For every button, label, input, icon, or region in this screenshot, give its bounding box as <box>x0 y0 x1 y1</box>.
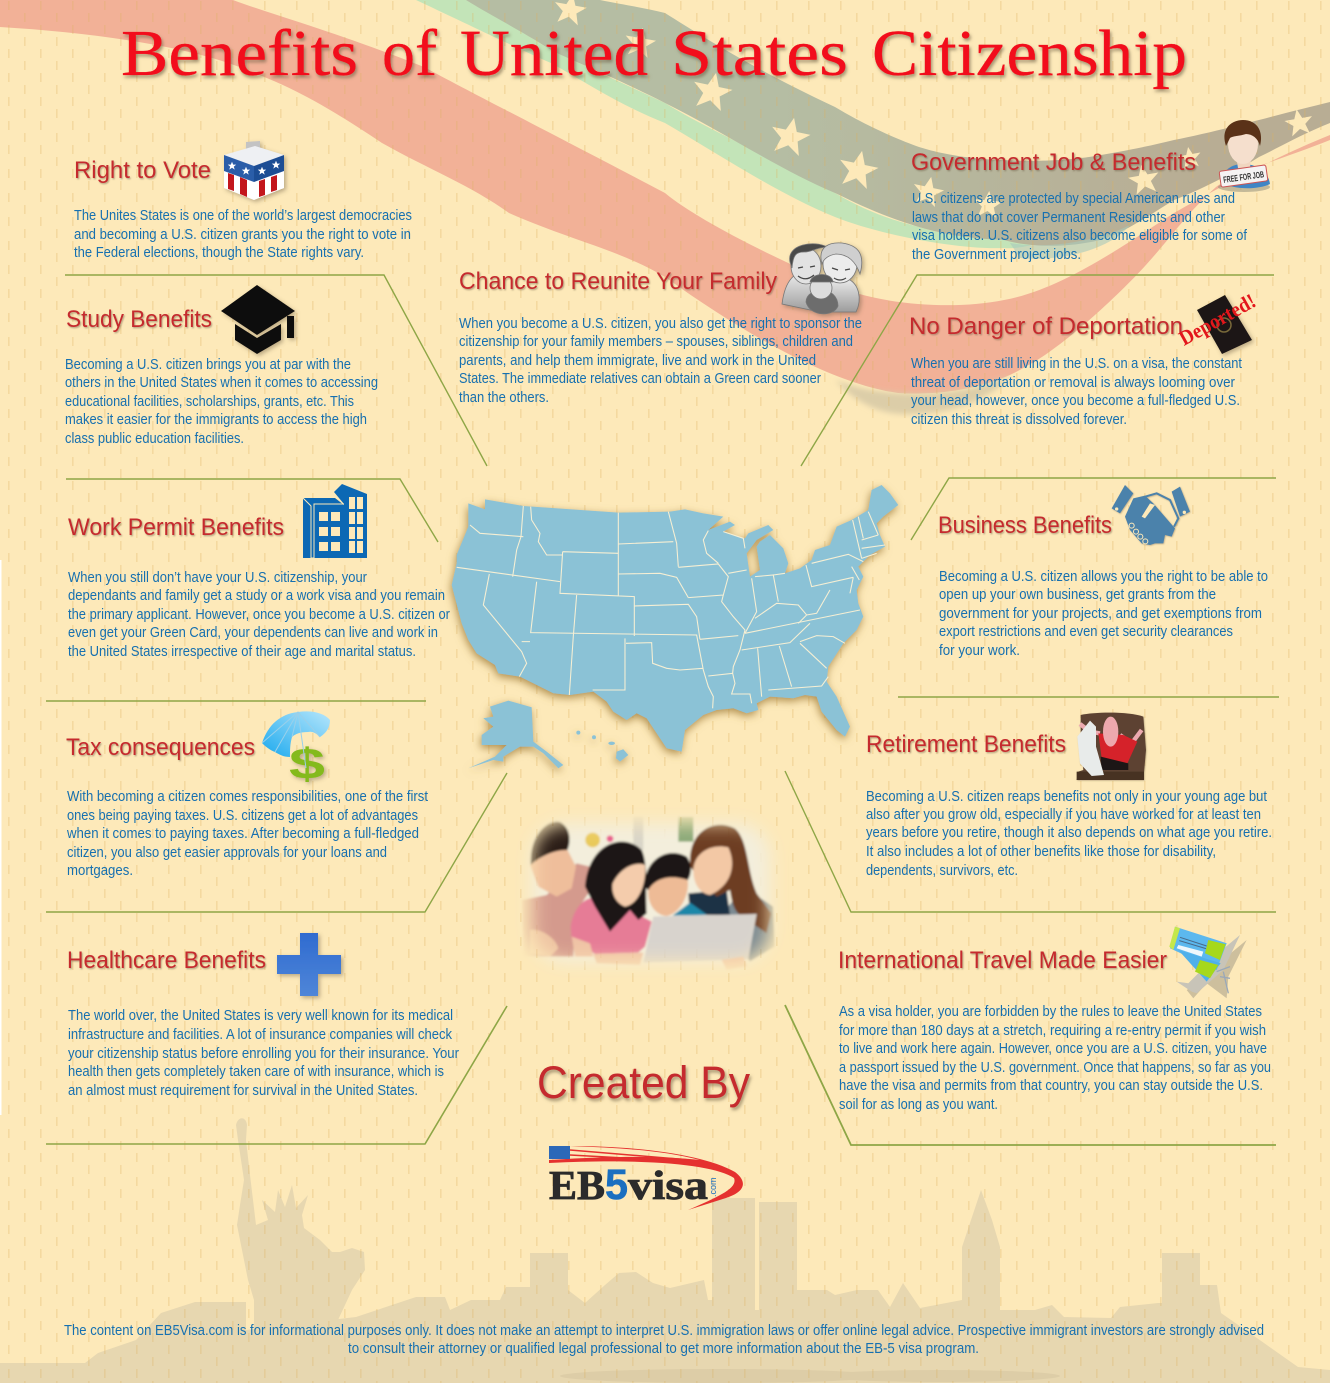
icon: passport deported: Deported! <box>1175 289 1260 350</box>
frame line: deportation <box>801 275 1274 466</box>
text: reunite family: States. The immediate relatives can obtain a Green card sooner <box>459 371 821 387</box>
text: government job: visa holders. U.S. citizens also become eligible for some of <box>912 228 1248 244</box>
text: government job <box>912 191 1248 263</box>
text: reunite family: than the others. <box>459 390 549 406</box>
text: right to vote <box>74 208 412 261</box>
text: study benefits: others in the United States when it comes to accessing <box>65 375 378 391</box>
text: work permit <box>68 570 450 660</box>
text: travel: for more than 180 days at a stretch, requiring a re-entry permit if you wish <box>839 1023 1266 1039</box>
text: study benefits: makes it easier for the immigrants to access the high <box>65 412 367 428</box>
text: travel: a passport issued by the U.S. government. Once that happens, so far as you <box>839 1060 1271 1076</box>
frame line: tax <box>46 701 507 912</box>
text: healthcare: health then gets completely taken care of with insurance, which is <box>68 1064 444 1080</box>
text: right to vote: the Federal elections, though the State rights vary. <box>74 245 364 261</box>
text: work permit: dependants and family get a study or a work visa and you remain <box>68 588 445 604</box>
title: United <box>460 17 648 90</box>
text: work permit: the primary applicant. However, once you become a U.S. citizen or <box>68 607 450 623</box>
text: travel <box>839 1004 1271 1113</box>
text: government job: U.S. citizens are protected by special American rules and <box>912 191 1235 207</box>
text: business <box>939 569 1268 659</box>
heading: study benefits: Study Benefits <box>66 306 212 333</box>
icon: ballot box <box>224 141 284 200</box>
text: business: Becoming a U.S. citizen allows you the right to be able to <box>939 569 1268 585</box>
text: tax: ones being paying taxes. U.S. citizens get a lot of advantages <box>67 808 418 824</box>
laptop <box>643 914 757 963</box>
logo: EB5visa: 5 <box>605 1161 628 1209</box>
icon: free for job person: FREE FOR JOB <box>1223 169 1265 185</box>
text: healthcare: The world over, the United States is very well known for its medical <box>68 1008 453 1024</box>
icon: family <box>782 243 862 314</box>
text: work permit: When you still don’t have your U.S. citizenship, your <box>68 570 367 586</box>
disclaimer footer <box>64 1323 1264 1357</box>
icon: graduation cap <box>221 285 295 354</box>
frame line: healthcare <box>46 1006 507 1144</box>
text: tax: citizen, you also get easier approvals for your loans and <box>67 845 387 861</box>
title: States <box>671 17 848 90</box>
text: study benefits: Becoming a U.S. citizen brings you at par with the <box>65 357 351 373</box>
text: study benefits: educational facilities, scholarships, grants, etc. This <box>65 394 354 410</box>
frame line: work <box>66 479 438 542</box>
panel: international travel <box>785 927 1276 1145</box>
panel: healthcare <box>46 933 507 1144</box>
text: tax: With becoming a citizen comes responsibilities, one of the first <box>67 789 428 805</box>
logo: EB5visa: .com <box>708 1177 718 1197</box>
icon: office building <box>303 484 367 558</box>
icon: umbrella and dollar: $ <box>289 740 325 789</box>
heading: reunite family: Chance to Reunite Your Family <box>459 268 778 295</box>
heading: travel: International Travel Made Easier <box>838 947 1167 974</box>
skyline silhouette <box>0 1118 1330 1383</box>
icon: umbrella and dollar <box>262 711 330 789</box>
text: retirement: years before you retire, though it also depends on what age you retire. <box>866 825 1272 841</box>
text: retirement <box>866 789 1272 879</box>
text: healthcare: your citizenship status before enrolling you for their insurance. Your <box>68 1046 459 1062</box>
heading: business: Business Benefits <box>938 512 1112 539</box>
text: study benefits <box>65 357 378 447</box>
title: Citizenship <box>872 17 1187 90</box>
photo: family with laptop <box>522 816 778 970</box>
frame line: study <box>65 275 487 466</box>
text: reunite family: parents, and help them immigrate, live and work in the United <box>459 353 816 369</box>
text: deportation <box>911 356 1242 428</box>
disclaimer footer: to consult their attorney or qualified legal professional to get more information about the EB-5 visa program. <box>348 1341 979 1357</box>
heading: created by: Created By <box>537 1057 750 1108</box>
text: retirement: It also includes a lot of other benefits like those for disability, <box>866 844 1216 860</box>
logo: EB5visa: visa <box>628 1162 708 1208</box>
frame line: retirement <box>785 697 1279 912</box>
text: reunite family: When you become a U.S. citizen, you also get the right to sponsor the <box>459 316 862 332</box>
text: deportation: When you are still living in the U.S. on a visa, the constant <box>911 356 1242 372</box>
text: travel: As a visa holder, you are forbidden by the rules to leave the United States <box>839 1004 1262 1020</box>
text: right to vote: and becoming a U.S. citizen grants you the right to vote in <box>74 227 411 243</box>
text: deportation: threat of deportation or removal is always looming over <box>911 375 1235 391</box>
text: deportation: your head, however, once you become a full-fledged U.S. <box>911 393 1240 409</box>
text: business: open up your own business, get grants from the <box>939 587 1216 603</box>
icon: handshake <box>1112 485 1190 545</box>
panel: study benefits <box>65 275 487 466</box>
panel: tax consequences <box>46 701 507 912</box>
text: government job: the Government project jobs. <box>912 247 1081 263</box>
text: government job: laws that do not cover Permanent Residents and other <box>912 210 1225 226</box>
heading: deportation: No Danger of Deportation <box>909 313 1183 340</box>
text: work permit: even get your Green Card, your dependents can live and work in <box>68 625 438 641</box>
heading: retirement: Retirement Benefits <box>866 731 1066 758</box>
heading: right to vote: Right to Vote <box>74 157 211 184</box>
heading: healthcare: Healthcare Benefits <box>67 947 266 974</box>
girl <box>571 898 652 954</box>
heading: government job: Government Job & Benefits <box>911 149 1196 176</box>
panel: deportation <box>801 275 1274 466</box>
text: work permit: the United States irrespective of their age and marital status. <box>68 644 416 660</box>
icon: free for job person <box>1218 120 1270 192</box>
heading: work permit: Work Permit Benefits <box>68 514 284 541</box>
panel: reunite family <box>459 243 862 406</box>
icon: medical plus <box>277 933 341 996</box>
text: retirement: dependents, survivors, etc. <box>866 863 1018 879</box>
frame line: travel <box>785 1005 1276 1145</box>
text: healthcare: an almost must requirement for survival in the United States. <box>68 1083 418 1099</box>
father <box>522 863 590 957</box>
text: tax: when it comes to paying taxes. After becoming a full-fledged <box>66 826 419 842</box>
icon: man in armchair <box>1077 713 1146 780</box>
panel: retirement <box>785 697 1279 912</box>
text: travel: soil for as long as you want. <box>839 1097 998 1113</box>
text: travel: have the visa and permits from that country, you can stay outside the U.S. <box>839 1078 1263 1094</box>
icon: tickets and plane <box>1169 927 1247 998</box>
title: Benefits <box>121 17 358 90</box>
map: United States <box>452 485 898 768</box>
text: study benefits: class public education facilities. <box>65 431 244 447</box>
text: business: government for your projects, and get exemptions from <box>939 606 1262 622</box>
flag ribbon <box>0 0 1330 414</box>
text: tax <box>66 789 428 879</box>
logo: EB5visa: EB <box>549 1162 605 1208</box>
text: healthcare <box>68 1008 459 1099</box>
text: right to vote: The Unites States is one of the world’s largest democracies <box>74 208 412 224</box>
title: of <box>382 17 437 90</box>
text: business: for your work. <box>939 643 1020 659</box>
logo: EB5visa <box>549 1146 743 1210</box>
text: reunite family <box>459 316 862 406</box>
panel: right to vote <box>74 141 412 261</box>
text: retirement: Becoming a U.S. citizen reaps benefits not only in your young age but <box>866 789 1267 805</box>
text: tax: mortgages. <box>67 863 133 879</box>
panel: work permit <box>66 479 450 660</box>
text: retirement: also after you grow old, especially if you have worked for at least ten <box>866 807 1261 823</box>
text: healthcare: infrastructure and facilities. A lot of insurance companies will check <box>68 1027 453 1043</box>
text: reunite family: citizenship for your family members – spouses, siblings, children and <box>459 334 853 350</box>
mother <box>726 898 775 962</box>
frame line: business <box>911 478 1276 540</box>
text: travel: to live and work here again. However, once you are a U.S. citizen, you have <box>839 1041 1267 1057</box>
boy <box>673 903 707 916</box>
panel: business <box>911 478 1276 659</box>
text: deportation: citizen this threat is dissolved forever. <box>911 412 1127 428</box>
heading: tax: Tax consequences <box>66 734 255 761</box>
panel: government job <box>911 120 1270 263</box>
text: business: export restrictions and even get security clearances <box>939 624 1233 640</box>
